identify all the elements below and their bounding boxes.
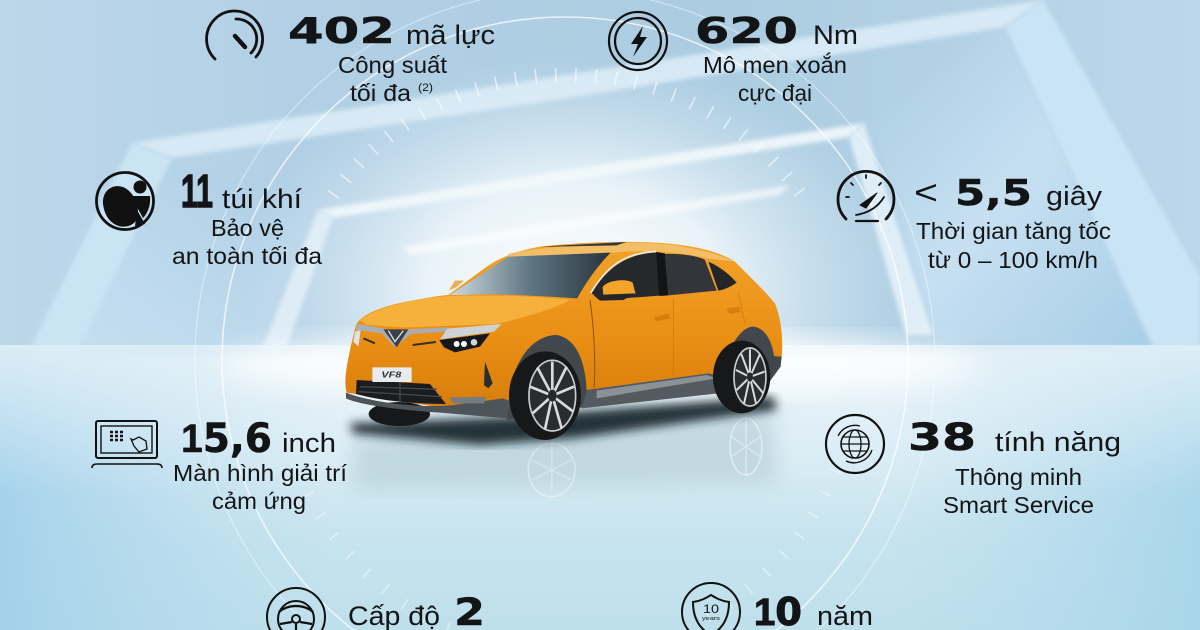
rear wheel [713, 341, 770, 413]
side sill [582, 373, 722, 408]
description line 2: an toàn tối đa [172, 243, 322, 269]
description: Thời gian tăng tốc [916, 218, 1111, 244]
description: Thông minh [955, 464, 1082, 490]
far front wheel [369, 402, 430, 426]
icon: globe [826, 415, 884, 473]
value: 15,6 [181, 416, 272, 462]
value: 402 [288, 11, 395, 52]
icon: warranty shield: years [702, 616, 721, 622]
stat: under 5.5 seconds [838, 171, 1111, 273]
mirrors [603, 280, 636, 295]
footnote: (2) [418, 82, 433, 94]
icon: speed gauge [838, 171, 894, 221]
licence plate [372, 367, 412, 382]
description: Công suất [338, 52, 448, 78]
description: Màn hình giải trí [173, 460, 348, 486]
stat: 38 smart features [826, 415, 1121, 518]
vent and fog lamp [484, 362, 493, 388]
dial: concentric circles and ticks [195, 0, 935, 630]
stat: 10 year warranty [682, 583, 873, 630]
stat: 11 airbags [96, 165, 322, 269]
icon: touchscreen laptop [92, 421, 162, 468]
icon: speedometer [207, 11, 263, 59]
car reflection [353, 410, 777, 497]
value: 11 [181, 165, 213, 217]
icon: airbag [96, 172, 154, 230]
description line 2: Smart Service [943, 492, 1094, 518]
icon: lightning in circle [609, 12, 667, 70]
stat: 620 Nm torque [609, 11, 858, 106]
unit: Nm [813, 20, 858, 50]
unit: giây [1046, 181, 1103, 211]
side window rear [665, 254, 717, 295]
front V badge and chrome [356, 324, 448, 347]
stat: under 5.5 seconds: 5,5 [955, 173, 1032, 214]
windshield [450, 253, 611, 298]
unit: mã lực [406, 20, 495, 50]
car: orange VF8 SUV [345, 242, 782, 445]
stat: 402 horsepower [207, 11, 495, 106]
ground shadow [350, 397, 777, 445]
roof [507, 243, 735, 262]
description line 2: từ 0 – 100 km/h [928, 247, 1098, 273]
unit: inch [282, 428, 336, 458]
description: Bảo vệ [211, 215, 284, 241]
body shell [345, 242, 782, 418]
description line 2: cực đại [738, 80, 812, 106]
value: 38 [908, 416, 976, 459]
unit: túi khí [222, 184, 303, 214]
description: Mô men xoắn [703, 52, 847, 78]
value: 620 [695, 11, 798, 52]
front wheel [509, 351, 581, 440]
door seams and handles [590, 300, 595, 388]
value: < [914, 174, 938, 212]
wheel arches [507, 335, 587, 420]
description line 2: tối đa [350, 80, 411, 106]
licence plate: VF8 [381, 369, 402, 379]
unit: tính năng [995, 427, 1121, 457]
icon: warranty shield [682, 583, 740, 630]
headlight [439, 333, 490, 352]
hood highlight [360, 296, 570, 327]
description line 2: cảm ứng [212, 488, 306, 514]
grille [356, 380, 446, 404]
side window front [591, 253, 660, 299]
icon: warranty shield: 10 [703, 602, 719, 616]
icon: steering wheel [267, 588, 325, 630]
lower front bumper [346, 393, 511, 418]
stat: 15.6 inch screen [92, 416, 348, 514]
stat: level 2 driving assist [267, 588, 485, 630]
